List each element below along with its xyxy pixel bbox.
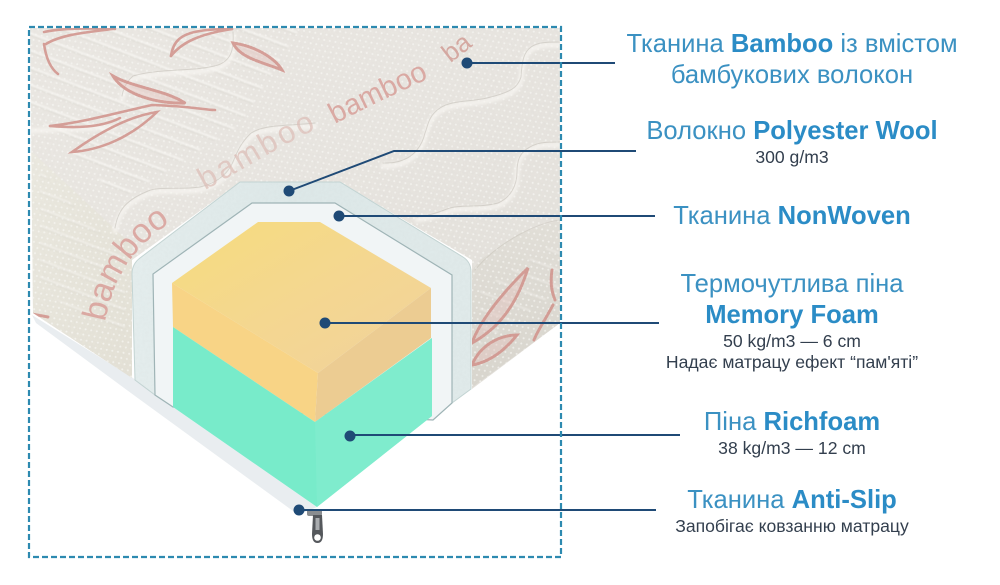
label: richfoam bbox=[704, 408, 880, 458]
wool texture bbox=[132, 182, 472, 404]
label: memory foam bbox=[666, 270, 918, 372]
richfoam right face bbox=[315, 338, 432, 507]
zipper pull bbox=[307, 509, 323, 543]
quilting seams bbox=[30, 32, 560, 270]
layer: nonwoven fabric bbox=[153, 203, 452, 420]
label: polyester wool bbox=[646, 117, 938, 167]
layer: memory foam right side bbox=[315, 288, 431, 422]
layer: memory foam left side bbox=[172, 283, 318, 422]
layer: polyester wool bbox=[132, 182, 471, 420]
label: memory foam: Термочутлива піна bbox=[680, 270, 904, 298]
label: anti-slip: Тканина Anti-Slip bbox=[687, 486, 897, 514]
label: richfoam: 38 kg/m3 — 12 cm bbox=[718, 438, 866, 458]
label: memory foam: Memory Foam bbox=[705, 301, 879, 329]
label: richfoam: Піна Richfoam bbox=[704, 408, 880, 436]
leader: bamboo bbox=[462, 58, 615, 68]
bamboo fabric cover bbox=[30, 28, 560, 389]
label: polyester wool: 300 g/m3 bbox=[755, 147, 829, 167]
leader: memory foam bbox=[320, 318, 659, 328]
label: bamboo: Тканина Bamboo із вмістом bbox=[626, 30, 958, 58]
dashed frame bbox=[29, 27, 561, 557]
leader: nonwoven bbox=[334, 210, 655, 222]
embroidered bamboo lettering: bamboo bbox=[196, 116, 313, 190]
pink bamboo leaves bbox=[32, 28, 555, 365]
label: bamboo bbox=[626, 30, 958, 89]
label: anti-slip bbox=[675, 486, 909, 536]
layer: richfoam bbox=[173, 327, 432, 507]
label: anti-slip: Запобігає ковзанню матрацу bbox=[675, 516, 909, 536]
zipper edge strip bbox=[32, 315, 317, 514]
label: polyester wool: Волокно Polyester Wool bbox=[646, 117, 938, 145]
embroidered bamboo lettering: ba bbox=[436, 26, 477, 68]
mattress illustration bbox=[30, 28, 560, 543]
leader: richfoam bbox=[344, 430, 680, 442]
label: memory foam: Надає матрацу ефект “пам'яті” bbox=[666, 352, 918, 372]
label: memory foam: 50 kg/m3 — 6 cm bbox=[723, 331, 861, 351]
label: bamboo: бамбукових волокон bbox=[671, 61, 913, 89]
embroidered bamboo lettering: bamboo bbox=[81, 211, 166, 320]
embroidered bamboo lettering: bamboo bbox=[326, 66, 426, 123]
leader: polyester wool bbox=[284, 151, 636, 196]
label: nonwoven: Тканина NonWoven bbox=[673, 202, 911, 230]
leader: anti-slip bbox=[294, 504, 656, 516]
embroidered bamboo lettering bbox=[81, 37, 474, 320]
layer: memory foam top bbox=[172, 222, 431, 373]
